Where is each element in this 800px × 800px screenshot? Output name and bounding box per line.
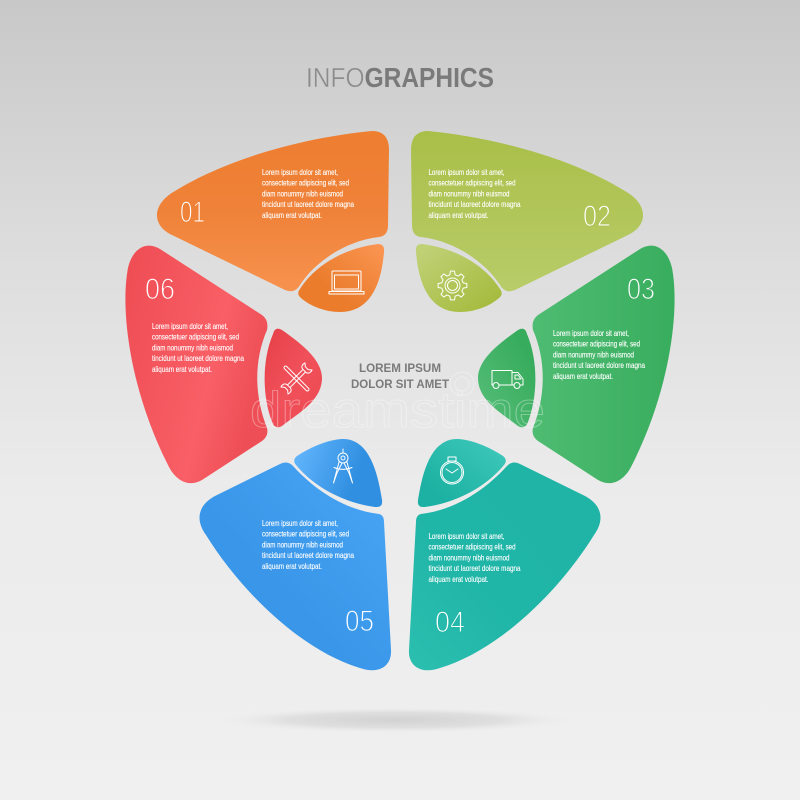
centre heading bbox=[351, 363, 449, 391]
segment shape 04 bbox=[409, 463, 600, 670]
panel: 04 bbox=[409, 463, 600, 670]
number 02: 02 bbox=[583, 200, 611, 233]
panel: 01 icon segment bbox=[298, 244, 384, 312]
text block 06 bbox=[152, 322, 244, 374]
panel: 03 bbox=[533, 246, 675, 483]
text block 02: aliquam erat volutpat. bbox=[428, 211, 488, 220]
panel: 05 icon segment bbox=[294, 439, 382, 507]
number 06: 06 bbox=[145, 273, 175, 306]
segment shape 03 bbox=[533, 246, 675, 483]
icon: compass bbox=[334, 449, 352, 483]
number 03: 03 bbox=[627, 273, 655, 306]
text block 02 bbox=[428, 168, 521, 220]
text block 05: Lorem ipsum dolor sit amet, bbox=[262, 519, 338, 528]
text block 04: Lorem ipsum dolor sit amet, bbox=[428, 532, 504, 541]
panel: 06 icon segment bbox=[265, 329, 322, 427]
text block 01 bbox=[262, 168, 354, 220]
text block 03: tincidunt ut laoreet dolore magna bbox=[553, 361, 645, 370]
segment shape 01 bbox=[157, 131, 389, 291]
text block 01: tincidunt ut laoreet dolore magna bbox=[262, 200, 354, 209]
text block 03 bbox=[553, 329, 645, 381]
text block 04: tincidunt ut laoreet dolore magna bbox=[428, 564, 521, 573]
panel: 01 bbox=[157, 131, 389, 291]
icon: laptop bbox=[329, 271, 364, 294]
text block 01: diam nonummy nibh euismod bbox=[262, 189, 343, 198]
icon: gear bbox=[438, 271, 467, 300]
text block 04: diam nonummy nibh euismod bbox=[428, 553, 510, 562]
number 04: 04 bbox=[435, 606, 465, 639]
floor shadow bbox=[215, 707, 575, 733]
text block 05: aliquam erat volutpat. bbox=[262, 562, 322, 571]
panel: 02 icon segment bbox=[416, 244, 502, 312]
number 01: 01 bbox=[180, 196, 205, 229]
text block 06: diam nonummy nibh euismod bbox=[152, 343, 233, 352]
text block 03: consectetuer adipiscing elit, sed bbox=[553, 340, 640, 349]
segment shape 02 bbox=[411, 131, 643, 291]
title: INFOGRAPHICS bbox=[306, 62, 494, 93]
panel: 05 bbox=[200, 463, 391, 670]
text block 02: tincidunt ut laoreet dolore magna bbox=[428, 200, 521, 209]
text block 03: diam nonummy nibh euismod bbox=[553, 350, 634, 359]
text block 02: diam nonummy nibh euismod bbox=[428, 189, 510, 198]
text block 06: Lorem ipsum dolor sit amet, bbox=[152, 322, 228, 331]
text block 06: tincidunt ut laoreet dolore magna bbox=[152, 354, 244, 363]
text block 04: aliquam erat volutpat. bbox=[428, 575, 488, 584]
text block 01: Lorem ipsum dolor sit amet, bbox=[262, 168, 338, 177]
text block 05 bbox=[262, 519, 354, 571]
text block 02: consectetuer adipiscing elit, sed bbox=[428, 179, 516, 188]
panel: 06 bbox=[125, 246, 267, 483]
centre heading: DOLOR SIT AMET bbox=[351, 379, 449, 391]
text block 04 bbox=[428, 532, 521, 584]
text block 01: consectetuer adipiscing elit, sed bbox=[262, 179, 349, 188]
watermark: dreamstime bbox=[250, 382, 545, 438]
text block 06: aliquam erat volutpat. bbox=[152, 365, 212, 374]
segment shape 05 bbox=[200, 463, 391, 670]
text block 05: consectetuer adipiscing elit, sed bbox=[262, 530, 349, 539]
panel: 04 icon segment bbox=[418, 439, 506, 507]
panel: 02 bbox=[411, 131, 643, 291]
text block 04: consectetuer adipiscing elit, sed bbox=[428, 543, 516, 552]
icon: stopwatch bbox=[440, 457, 464, 484]
text block 02: Lorem ipsum dolor sit amet, bbox=[428, 168, 504, 177]
panel: 03 icon segment bbox=[478, 329, 535, 427]
icon: truck bbox=[492, 370, 523, 388]
text block 03: Lorem ipsum dolor sit amet, bbox=[553, 329, 629, 338]
icon: crossed tools bbox=[281, 363, 312, 394]
text block 06: consectetuer adipiscing elit, sed bbox=[152, 333, 239, 342]
text block 01: aliquam erat volutpat. bbox=[262, 211, 322, 220]
text block 05: diam nonummy nibh euismod bbox=[262, 540, 343, 549]
number 05: 05 bbox=[345, 605, 374, 638]
segment shape 06 bbox=[125, 246, 267, 483]
text block 03: aliquam erat volutpat. bbox=[553, 372, 613, 381]
centre heading: LOREM IPSUM bbox=[359, 363, 441, 375]
text block 05: tincidunt ut laoreet dolore magna bbox=[262, 551, 354, 560]
